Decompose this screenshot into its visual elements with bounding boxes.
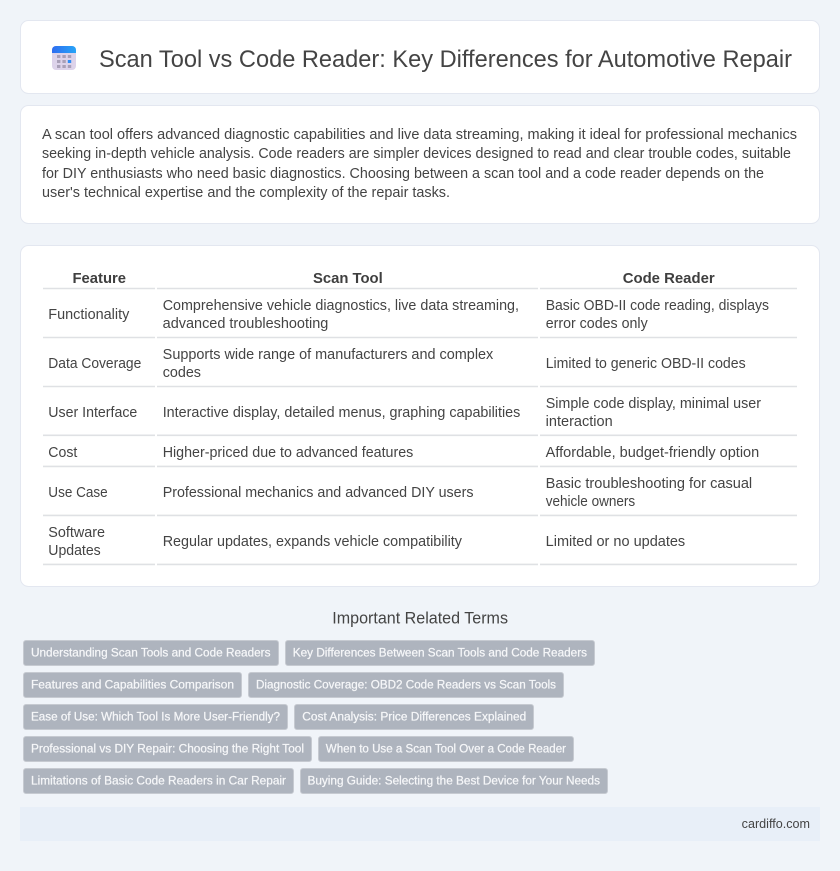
icon: calendar: [52, 46, 76, 70]
row: functionality: Functionality: [48, 307, 130, 323]
table header row: Feature: [72, 270, 126, 287]
footer credit: cardiffo.com: [742, 817, 810, 831]
row: cost: Higher-priced due to advanced features: [163, 445, 413, 461]
tag: Key Differences Between Scan Tools and Code Readers: [293, 646, 587, 660]
text block: summary paragraph: user's technical expertise and the complexity of the repair tasks.: [42, 185, 450, 201]
row: data coverage: Supports wide range of manufacturers and complex: [163, 347, 494, 363]
row: cost: [48, 445, 759, 461]
tag: Diagnostic Coverage: OBD2 Code Readers vs Scan Tools: [256, 678, 556, 692]
row: data coverage: codes: [163, 365, 201, 381]
row: use case: vehicle owners: [546, 494, 635, 510]
table header row: [72, 270, 715, 287]
row: functionality: advanced troubleshooting: [163, 316, 328, 332]
row: user interface: [48, 396, 761, 430]
footer bar: [20, 807, 820, 841]
row: software updates: Software: [48, 525, 105, 541]
row: use case: Use Case: [48, 485, 108, 501]
tag list: related terms: [24, 640, 608, 794]
title: Scan Tool vs Code Reader: Key Differences for Automotive Repair: [99, 46, 792, 73]
row: software updates: Limited or no updates: [546, 534, 685, 550]
table header row: Code Reader: [623, 270, 715, 287]
tag: [24, 736, 312, 762]
tag: Buying Guide: Selecting the Best Device for Your Needs: [308, 774, 600, 788]
row: software updates: [48, 525, 685, 559]
row: cost: Cost: [48, 445, 77, 461]
tag: Understanding Scan Tools and Code Readers: [31, 646, 270, 660]
row: data coverage: [48, 347, 746, 381]
tag: [318, 736, 574, 762]
tag: [300, 768, 608, 794]
heading: related terms: Important Related Terms: [332, 609, 508, 627]
tag: Ease of Use: Which Tool Is More User-Friendly?: [31, 710, 280, 724]
tag: Features and Capabilities Comparison: [31, 678, 234, 692]
row: use case: [48, 476, 752, 510]
row: user interface: User Interface: [48, 405, 137, 421]
tag: [24, 640, 278, 666]
row: functionality: [48, 298, 769, 332]
tag: [24, 704, 288, 730]
row: user interface: interaction: [546, 414, 613, 430]
panel: header: [20, 20, 820, 94]
row: functionality: Basic OBD-II code reading, displays: [546, 298, 769, 314]
row: functionality: error codes only: [546, 316, 648, 332]
text block: summary paragraph: A scan tool offers advanced diagnostic capabilities and live data streaming, making it ideal for professional mechanics: [42, 127, 797, 143]
row: cost: Affordable, budget-friendly option: [546, 445, 759, 461]
row: user interface: Interactive display, detailed menus, graphing capabilities: [163, 405, 520, 421]
row: software updates: Regular updates, expands vehicle compatibility: [163, 534, 463, 550]
row: use case: Basic troubleshooting for casual: [546, 476, 752, 492]
tag: Cost Analysis: Price Differences Explained: [302, 710, 526, 724]
row: data coverage: Limited to generic OBD-II codes: [546, 356, 746, 372]
row: functionality: Comprehensive vehicle diagnostics, live data streaming,: [163, 298, 519, 314]
tag: [294, 704, 534, 730]
text block: summary paragraph: [42, 127, 797, 201]
text block: summary paragraph: seeking in-depth vehicle analysis. Code readers are simpler devices designed to read and clear trouble codes, suitable: [42, 146, 791, 162]
tag: [24, 672, 242, 698]
tag: [24, 768, 294, 794]
row: user interface: Simple code display, minimal user: [546, 396, 761, 412]
panel: summary: [20, 106, 820, 224]
text block: summary paragraph: for DIY enthusiasts who need basic diagnostics. Choosing between a scan tool and a code reader depends on the: [42, 166, 764, 182]
row: use case: Professional mechanics and advanced DIY users: [163, 485, 473, 501]
tag: Professional vs DIY Repair: Choosing the Right Tool: [31, 742, 304, 756]
tag: [286, 640, 594, 666]
tag: [248, 672, 564, 698]
table header row: Scan Tool: [313, 270, 383, 287]
row: data coverage: Data Coverage: [48, 356, 141, 372]
row: software updates: Updates: [48, 543, 101, 559]
tag: When to Use a Scan Tool Over a Code Reader: [326, 742, 566, 756]
panel: comparison table: [20, 246, 820, 586]
tag: Limitations of Basic Code Readers in Car Repair: [31, 774, 286, 788]
